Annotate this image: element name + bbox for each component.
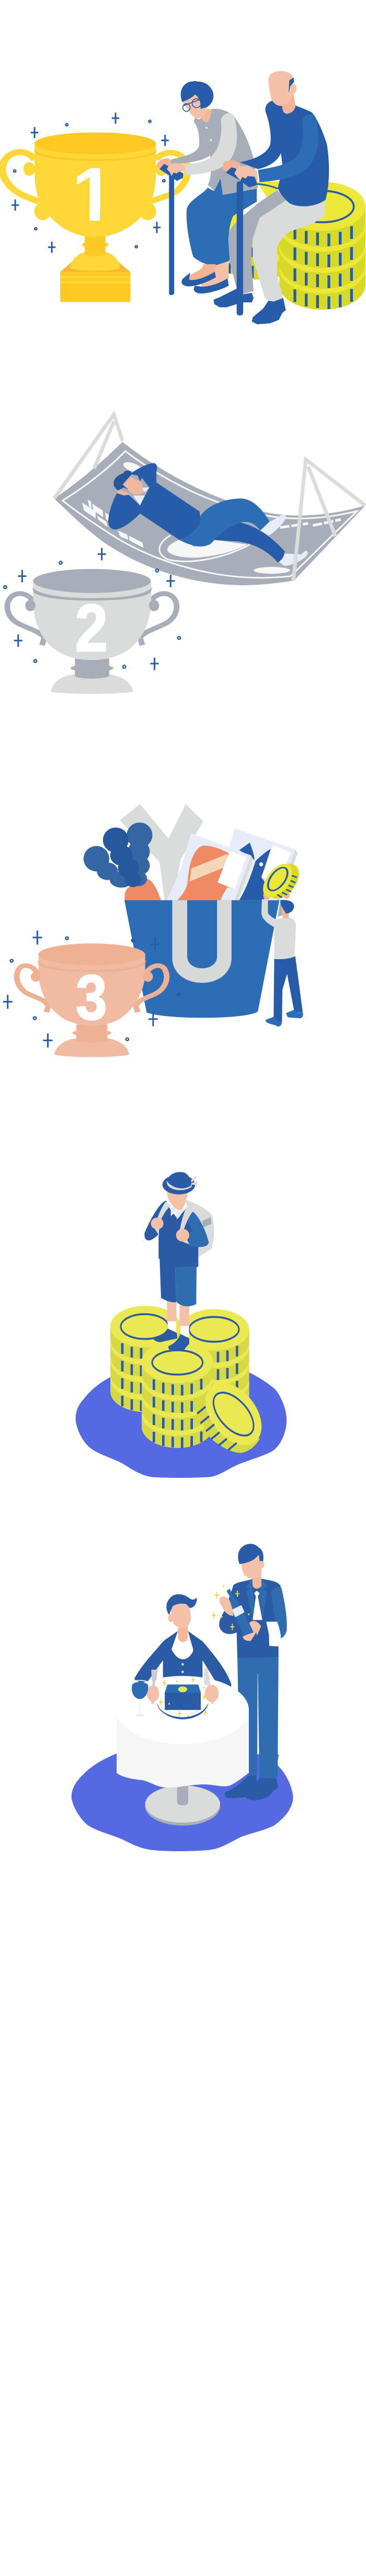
tilted coin [195, 1370, 271, 1458]
elderly man with cane [213, 71, 329, 324]
blue shopping bag with U [124, 900, 279, 1018]
left coin stack [110, 1306, 181, 1412]
seated diner [134, 1594, 231, 1697]
person holding coin [257, 860, 305, 1027]
place setting: gift box on plate, cutlery and wine [132, 1668, 219, 1719]
hammock ropes [54, 415, 365, 580]
traveller with backpack and hat [144, 1172, 214, 1351]
coin stacks under the couple [228, 181, 365, 310]
grocery bag contents [84, 804, 298, 900]
sparkles around bronze trophy [3, 931, 181, 1047]
scene 1: gold trophy and elderly couple on coins [2, 71, 365, 324]
gold trophy number 1 [2, 132, 188, 302]
bronze trophy number 3 [17, 943, 167, 1057]
purple blob ground [72, 1753, 293, 1851]
bronze trophy number 3: 3 [76, 962, 107, 1033]
purple blob ground [76, 1373, 287, 1478]
scene 4: traveller standing on coin stacks [76, 1172, 287, 1478]
banknote hammock [54, 442, 365, 585]
waiter with bottle [212, 1544, 287, 1800]
elderly woman with cane [157, 81, 258, 295]
table pedestal [145, 1783, 220, 1826]
tablecloth [117, 1676, 249, 1787]
scene 5: diner at table with waiter [72, 1544, 293, 1851]
sparkles around gold trophy [12, 112, 169, 253]
reclining man [108, 463, 308, 566]
right coin stack [179, 1309, 249, 1416]
silver trophy number 2: 2 [75, 590, 108, 666]
centre coin stack [142, 1340, 213, 1448]
sparkles around silver trophy [4, 548, 180, 670]
scene 3: shopping bag of groceries and bronze trophy [3, 804, 305, 1057]
gold trophy number 1: 1 [72, 152, 115, 237]
silver trophy number 2 [7, 569, 177, 694]
scene 2: man in banknote hammock and silver trophy [4, 415, 365, 694]
